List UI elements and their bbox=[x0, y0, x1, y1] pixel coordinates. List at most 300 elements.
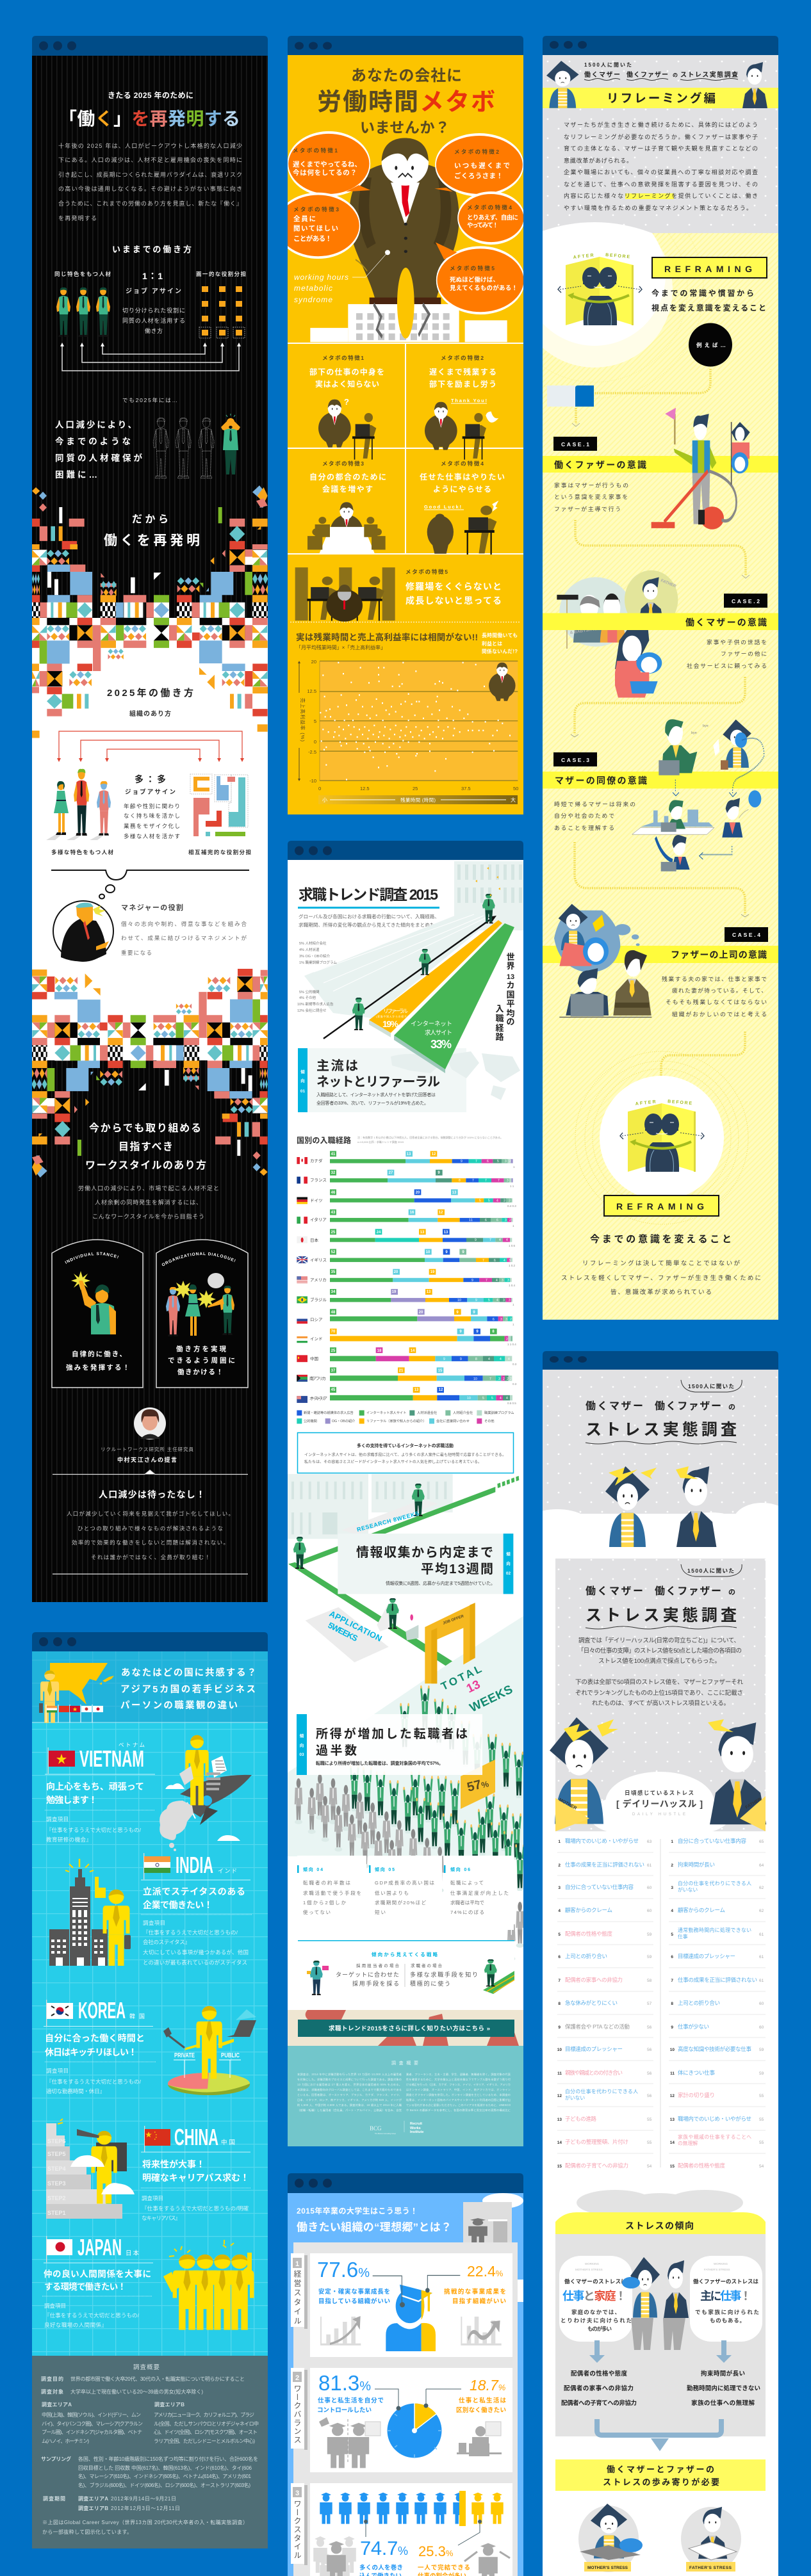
panel: stress survey bbox=[522, 1370, 791, 2576]
57 percent tag bbox=[461, 1760, 495, 1809]
inner bar numbers: 1095433 bbox=[457, 1299, 511, 1302]
job assign: 切り分けられた役割に bbox=[122, 307, 185, 314]
chart legend: 公的機関 bbox=[304, 1418, 317, 1423]
intro text: 企業や職場においても、個々の従業員への丁寧な相談対応や調査 bbox=[564, 168, 758, 175]
chart tags numbers: 70 bbox=[331, 1330, 336, 1334]
ranking table: father: 61 bbox=[759, 1932, 764, 1937]
arrows down bbox=[589, 2340, 732, 2363]
survey summary: 各国、性別・年齢10歳階級別に150名ずつ均等に割り付けを行い、合計600名を bbox=[78, 2456, 258, 2462]
icon: stairs man: STEP1 bbox=[47, 2210, 66, 2216]
chart tags numbers: 10 bbox=[426, 1251, 430, 1254]
outside bar numbers bbox=[507, 1165, 517, 1405]
ranking table: father: 自分の仕事を代わりにできる人 bbox=[678, 1880, 751, 1886]
vertical label: 平 bbox=[506, 999, 515, 1009]
chart tags numbers: 24 bbox=[377, 1231, 381, 1235]
card 2: work balance bbox=[291, 2368, 512, 2472]
feature 2 cell: 部下を励まし労う bbox=[429, 379, 496, 389]
outside bar numbers: 1 bbox=[512, 1323, 514, 1326]
survey title: 働くファザー bbox=[627, 70, 668, 79]
survey title: 1500人に聞いた bbox=[688, 1383, 734, 1389]
case 1: 働くファザーの意識 bbox=[554, 460, 646, 470]
father stress text: でも家族に向けられた bbox=[695, 2309, 759, 2315]
divider bottom bbox=[53, 1574, 248, 1575]
bubble texts: 全員に bbox=[293, 215, 316, 223]
icon: worried man bbox=[221, 414, 240, 474]
chart axis labels: 20 bbox=[311, 659, 316, 665]
divider top bbox=[53, 1470, 248, 1474]
internet support box bbox=[297, 1433, 514, 1473]
chart tags numbers: 35 bbox=[331, 1270, 336, 1274]
for example bubble bbox=[689, 323, 732, 366]
survey summary: 調査概要 bbox=[133, 2363, 160, 2371]
case 2: CASE.2 bbox=[732, 598, 760, 604]
ranking table: mother: 10 bbox=[557, 2048, 562, 2052]
browser header panel 2 bbox=[288, 36, 523, 55]
inner bar numbers: 6332 bbox=[493, 1318, 512, 1322]
card 1: management style bbox=[291, 2253, 512, 2357]
survey item: 『仕事をするうえで大切だと思うもの/明確 bbox=[142, 2205, 249, 2212]
section heading: styles: 今からでも取り組める bbox=[89, 1122, 201, 1134]
mother list: 配偶者の性格や態度 bbox=[571, 2370, 627, 2378]
section: vietnam bbox=[45, 1735, 252, 1851]
headline: 企業で働きたい！ bbox=[143, 1900, 213, 1910]
job offer label: JOB OFFER bbox=[443, 1614, 465, 1626]
survey overview: The Boston Consulting Group bbox=[375, 2133, 397, 2135]
country names: ドイツ bbox=[310, 1199, 323, 1203]
vertical label: 国 bbox=[506, 990, 515, 1000]
icon: big father bbox=[708, 1719, 766, 1831]
trend 05 card: 短い bbox=[375, 1909, 386, 1915]
card: organizational dialogue: 働きかける！ bbox=[177, 1368, 223, 1376]
referral label: 19% bbox=[382, 1019, 399, 1029]
section intro bbox=[78, 1185, 219, 1220]
panel: working hours metabolic syndrome bbox=[277, 55, 524, 814]
bubble texts: ごくろうさま！ bbox=[454, 172, 503, 180]
trend 01 box: 向 bbox=[300, 1078, 305, 1083]
x axis bar: 残業時間 (時間) bbox=[400, 797, 436, 803]
ranking table: father: 配偶者の性格や態度 bbox=[678, 2162, 725, 2169]
ranking table: mother: 急な休みがとりにくい bbox=[565, 2000, 618, 2006]
ranking table: father: 55 bbox=[759, 2141, 764, 2145]
survey summary: 2012年9月14日〜9月21日 bbox=[111, 2495, 176, 2502]
ranking table: mother: 54 bbox=[647, 2164, 652, 2169]
chart tags numbers: 14 bbox=[411, 1349, 415, 1353]
chart axis labels bbox=[307, 659, 518, 791]
compromise band: ストレスの歩み寄りが必要 bbox=[603, 2477, 719, 2487]
ranking table: father bbox=[669, 1838, 766, 2169]
callout: 関係ないんだ!? bbox=[482, 648, 518, 654]
speech bubbles bbox=[277, 133, 524, 313]
ranking table: father: 3 bbox=[671, 1886, 673, 1890]
statement: 人口減少により、 bbox=[55, 419, 136, 430]
header strip bbox=[32, 1651, 268, 1722]
survey item: 『仕事をするうえで大切だと思うもの/ bbox=[46, 2078, 142, 2085]
intro text: マザーたちが生き生きと働き続けるために、具体的にはどのよう bbox=[564, 121, 758, 128]
chart tags numbers: 20 bbox=[394, 1270, 398, 1274]
survey item: 会社のステイタス』 bbox=[143, 1939, 190, 1945]
intro text: 十年後の 2025 年は、人口がピークアウトし本格的な人口減少 bbox=[58, 142, 242, 149]
manager portrait bbox=[53, 901, 113, 961]
stress trend section: ストレスの傾向 bbox=[625, 2221, 694, 2231]
trend 06 card: 傾向 06 bbox=[450, 1867, 470, 1872]
icon: work life people bbox=[319, 2417, 502, 2468]
ranking table: mother: 目標達成のプレッシャー bbox=[565, 2046, 623, 2052]
ranking table: mother: 12 bbox=[557, 2094, 562, 2098]
chart tags numbers: 16 bbox=[410, 1211, 414, 1215]
icon: stairs man: STEP4 bbox=[47, 2166, 66, 2172]
crowd of people bbox=[295, 1685, 525, 1961]
ranking table: mother: 56 bbox=[647, 2094, 652, 2098]
chart: stacked bars bbox=[297, 1151, 513, 1423]
chart tags numbers: 46 bbox=[331, 1191, 336, 1195]
ranking table: mother: がいない bbox=[565, 2094, 585, 2101]
case 4: CASE.4 bbox=[732, 932, 760, 938]
english label: working hours bbox=[294, 273, 348, 282]
survey summary: ム(ハノイ、ホーチミン) bbox=[42, 2438, 89, 2444]
white circle bbox=[523, 222, 666, 346]
content area bbox=[293, 2242, 518, 2576]
outside bar numbers: 1 0.4 bbox=[509, 1284, 516, 1287]
icon: multitasking person bbox=[464, 2543, 510, 2576]
chart tags numbers: 9 bbox=[445, 1251, 448, 1254]
chart tags numbers: 52 bbox=[331, 1251, 336, 1254]
but in 2025: でも2025年には… bbox=[122, 397, 177, 403]
feature 3 cell bbox=[307, 460, 386, 554]
chart tags numbers bbox=[331, 1153, 495, 1392]
job assign: 働き方 bbox=[145, 327, 163, 334]
labels under figures: 多様な特色をもつ人材 bbox=[51, 849, 113, 855]
strategy box bbox=[298, 1940, 514, 1999]
grey intro background bbox=[543, 55, 778, 233]
y axis bbox=[298, 661, 306, 781]
panel: reinventing work 2025 bbox=[32, 56, 268, 1602]
closing text: ひとつの取り組みで様々なものが解決されるような bbox=[78, 1525, 223, 1532]
intro text: を再発明する bbox=[58, 215, 97, 222]
survey overview: Works bbox=[410, 2126, 421, 2130]
cloud edge bbox=[522, 1503, 791, 1553]
icon: big mother: MOTHER bbox=[558, 1798, 577, 1811]
callout: 長時間働いても bbox=[482, 632, 518, 638]
referral label: リファーラル bbox=[383, 1008, 408, 1014]
chart: scatter bbox=[320, 661, 518, 781]
survey summary: サンプリング bbox=[41, 2456, 71, 2462]
ranking table: mother: 配偶者の性格や態度 bbox=[565, 1931, 612, 1937]
building top right bbox=[454, 861, 523, 930]
job assign text: なく持ち味を活かし bbox=[124, 813, 180, 819]
icon: mother top bbox=[546, 61, 579, 108]
case 2: CLEANING TRADER bbox=[562, 615, 603, 629]
trend 06 card: 求職者は平均で bbox=[450, 1899, 484, 1906]
trend 05 card: 傾向 05 bbox=[375, 1867, 395, 1872]
survey summary: 調査期間 bbox=[43, 2495, 65, 2502]
manager role text: 重要になる bbox=[121, 950, 152, 956]
chart note: n=13,000 出所：求職トレンド調査 2015 bbox=[357, 1140, 404, 1144]
headline: 勉強します！ bbox=[46, 1795, 97, 1805]
inner bar numbers: 105544 bbox=[467, 1397, 508, 1400]
card 1: management style: 安定・確実な事業成長を bbox=[318, 2288, 390, 2296]
mother stress text: MOTHER'S STRESS bbox=[575, 2268, 603, 2271]
intro text: などを通じて、仕事への意欲発揮を阻害する要因を見つけ、その bbox=[564, 181, 758, 188]
survey summary: 調査エリアB bbox=[78, 2505, 108, 2511]
feature 4 cell: ようにやらせる bbox=[433, 485, 491, 494]
chart axis labels: -10 bbox=[309, 778, 316, 784]
card: organizational dialogue: ORGANIZATIONAL DIALOGUE! bbox=[161, 1252, 236, 1266]
intro text: 引き起こし、成長期につくられた雇用パラダイムは、衰退リスク bbox=[58, 171, 242, 178]
title: あなたの会社に bbox=[351, 67, 462, 85]
ranking table: father: 62 bbox=[759, 1886, 764, 1890]
connecting arrows bbox=[60, 343, 241, 371]
icon: big father: FATHER bbox=[744, 1797, 762, 1810]
trend 01 box: 入職経路として、インターネット求人サイトを挙げた回答者は bbox=[316, 1092, 436, 1098]
card: organizational dialogue: できるよう周囲に bbox=[168, 1357, 235, 1365]
chart tags numbers: 32 bbox=[331, 1171, 336, 1175]
route tracks bbox=[304, 912, 514, 1073]
white bubble right bbox=[690, 2256, 762, 2342]
outside bar numbers: 1 bbox=[512, 1303, 514, 1306]
headline: 向上心をもち、頑張って bbox=[46, 1781, 144, 1792]
panel title bbox=[120, 1667, 256, 1711]
case 4: 組織がおかしいのではと考える bbox=[672, 1010, 767, 1017]
job assign: ジョブ アサイン bbox=[126, 287, 181, 295]
case 3: CASE.3 bbox=[561, 757, 589, 763]
people on timeline bbox=[293, 1484, 425, 1629]
labels under figures: 相互補完的な役割分担 bbox=[188, 849, 251, 855]
mother list: 配偶者への子育てへの非協力 bbox=[561, 2399, 637, 2407]
panel background bbox=[288, 55, 523, 814]
father stress illustration: FATHER'S STRESS bbox=[689, 2566, 732, 2570]
father stress text: 主に仕事！ bbox=[700, 2290, 751, 2303]
inner survey panel bbox=[555, 1559, 766, 1831]
survey summary: 名)、ブラジル(600名)、ドイツ(606名)、ロシア(600名)、オーストラリア(603名) bbox=[78, 2482, 250, 2488]
x axis bar: 小 bbox=[322, 797, 327, 803]
ranking table: father: 4 bbox=[671, 1909, 673, 1913]
section: japan bbox=[42, 2234, 254, 2330]
case 3 bbox=[543, 719, 778, 871]
ranking table: father: 13 bbox=[670, 2118, 675, 2122]
ranking table: father: 顧客からのクレーム bbox=[678, 1907, 725, 1913]
country names: イタリア bbox=[310, 1217, 327, 1222]
mother stress text: WORKING bbox=[585, 2262, 599, 2265]
ranking table: mother bbox=[557, 1838, 653, 2169]
outside bar numbers: 1 0.6 bbox=[509, 1244, 516, 1247]
survey overview: 性を確保するために、大学卒業以上と高校卒業以下でサンプル数を半数ずつ割り付 bbox=[406, 2077, 511, 2082]
icon: balance man: PRIVATE bbox=[174, 2052, 195, 2059]
chart legend bbox=[304, 1410, 514, 1423]
ranking table: mother: 55 bbox=[647, 2118, 652, 2122]
headline bbox=[143, 1886, 245, 1910]
chart legend: 職業訓練プログラム bbox=[484, 1410, 514, 1415]
survey overview: はオンライン調査、オーストラリア、中国、インド、南アフリカでは、オンライン bbox=[406, 2087, 511, 2092]
country kana: 韓国 bbox=[129, 2013, 145, 2020]
trend 02 title: 平均13週間 bbox=[421, 1562, 493, 1576]
card 2: work balance: 仕事と私生活を自分で bbox=[318, 2397, 384, 2404]
outside bar numbers: 0.3 bbox=[512, 1382, 517, 1386]
headline: 休日はキッチリほしい！ bbox=[45, 2047, 137, 2057]
panel background bbox=[32, 56, 268, 1602]
icon: stairs man: STEP5 bbox=[47, 2151, 66, 2157]
headline: 将来性が大事！ bbox=[142, 2159, 205, 2169]
trend 01 box: 主流は bbox=[316, 1058, 358, 1073]
ranking table: father: 家族や親戚の仕事をすることへ bbox=[678, 2134, 751, 2140]
survey overview: BCG bbox=[370, 2125, 382, 2132]
closing heading: 今までの意識を変えること bbox=[590, 1233, 732, 1245]
feature 4 cell: 任せた仕事はやりたい bbox=[420, 472, 505, 482]
flag: india bbox=[143, 1853, 170, 1879]
country kana: 中国 bbox=[221, 2139, 235, 2146]
ranking table: mother: 自分に合っていない仕事内容 bbox=[565, 1884, 634, 1890]
trend 05 card: 低い国よりも bbox=[375, 1890, 409, 1896]
chart tags numbers: 15 bbox=[438, 1369, 443, 1373]
role squares bbox=[199, 286, 245, 338]
portrait bbox=[134, 1407, 166, 1439]
section heading: リフレーミング編 bbox=[607, 92, 716, 105]
icon: father top bbox=[742, 62, 767, 108]
reframing box: REFRAMING bbox=[664, 264, 752, 274]
chart tags numbers: 9 bbox=[476, 1330, 479, 1334]
card 2: work balance: 区別なく働きたい bbox=[456, 2406, 506, 2414]
survey item: 『仕事をするうえで大切だと思うもの/ bbox=[143, 1929, 238, 1936]
ranking table: mother: 55 bbox=[647, 2141, 652, 2145]
trend 02 title: 情報収集から内定まで bbox=[356, 1545, 493, 1560]
ranking table: mother: 配偶者の子育てへの非協力 bbox=[565, 2162, 628, 2169]
section: india bbox=[49, 1852, 252, 1966]
card: individual stance: INDIVIDUAL STANCE! bbox=[65, 1252, 119, 1264]
strategy box: 多様な求職手段を知り bbox=[410, 1971, 478, 1978]
intro text: 意識改革があげられる。 bbox=[564, 157, 632, 164]
chart tags numbers: 13 bbox=[414, 1388, 419, 1392]
card 3: work style: ワークスタイル bbox=[293, 2500, 302, 2559]
ranking table: mother: 仕事の成果を正当に評価されない bbox=[565, 1861, 644, 1868]
icon: four men bbox=[163, 2240, 254, 2330]
manager role text: 個々の志向や制約、得意な事などを組み合 bbox=[121, 921, 247, 927]
case 1: CASE.1 bbox=[561, 441, 589, 448]
job assign text: 年齢や性別に関わり bbox=[124, 803, 180, 809]
feature 1 cell: 部下の仕事の中身を bbox=[309, 367, 384, 377]
small route labels: 4% その他 bbox=[299, 995, 316, 1000]
icon: buildings and man bbox=[49, 1859, 131, 1966]
survey item: 良好な職場の人間関係』 bbox=[44, 2322, 107, 2328]
total 13 weeks label: TOTAL bbox=[439, 1663, 484, 1693]
internet label: 33% bbox=[430, 1038, 452, 1051]
feature 1 cell: メタボの特徴1 bbox=[322, 355, 364, 361]
white bubble left bbox=[559, 2256, 632, 2342]
chart tags numbers: 25 bbox=[331, 1231, 336, 1235]
survey summary: バイ)、タイ(バンコク圏)、マレーシア(クアラルン bbox=[42, 2421, 143, 2427]
survey item bbox=[142, 2195, 249, 2221]
ranking table: father: 60 bbox=[759, 2002, 764, 2006]
feature 4 cell: メタボの特徴4 bbox=[441, 460, 484, 467]
trend 02 title: 02 bbox=[506, 1571, 511, 1576]
survey overview: Recruit bbox=[410, 2122, 422, 2126]
ranking table: mother: 自分の仕事を代わりにできる人 bbox=[565, 2088, 638, 2094]
headline bbox=[142, 2159, 249, 2183]
case 2: 家事や子供の世話を bbox=[707, 638, 767, 645]
ranking table: mother: 子どもの整理整頓、片付け bbox=[565, 2139, 628, 2145]
panel: asia five countries bbox=[32, 1651, 268, 2548]
inner intro text: 下の表は全部で50項目のストレス値を、マザーとファザーそれ bbox=[575, 1678, 743, 1686]
survey summary: 中国(上海)、韓国(ソウル)、インド(デリー、ムン bbox=[42, 2411, 141, 2418]
daily hassle heading: 日頃感じているストレス bbox=[625, 1790, 694, 1796]
researcher name: リクルートワークス研究所 主任研究員 bbox=[101, 1446, 193, 1452]
compromise band: 働くマザーとファザーの bbox=[607, 2465, 714, 2474]
icon: stairs man bbox=[46, 2119, 135, 2219]
trend 06 card: 仕事満足度が向上した bbox=[450, 1890, 509, 1896]
ranking table: father: 7 bbox=[671, 1979, 673, 1983]
manager role text: わせて、成果に結びつけるマネジメントが bbox=[121, 935, 247, 941]
trend 04 card: 転職者の約半数は bbox=[303, 1879, 351, 1886]
label: same people: 同じ特色をもつ人材 bbox=[54, 271, 111, 277]
intro text: 内容に応じた様々なリフレーミングを提供していくことは、働き bbox=[564, 192, 758, 199]
main title: 求職トレンド調査 2015 bbox=[299, 886, 438, 903]
x axis bar bbox=[318, 795, 518, 804]
inner intro text: 「日々の仕事の支障」のストレス値を50点とした場合の各項目の bbox=[578, 1647, 742, 1655]
icon: mother and father center bbox=[622, 2257, 689, 2350]
headline: 自分に合った働く時間と bbox=[45, 2033, 145, 2043]
section subheading: 組織のあり方 bbox=[129, 709, 171, 718]
father list bbox=[687, 2370, 760, 2407]
vertical label: 界 bbox=[506, 961, 515, 971]
trend 04 card bbox=[297, 1856, 366, 1930]
card 1: management style: 目指す組織がいい bbox=[452, 2297, 506, 2305]
survey summary: 調査エリアB bbox=[154, 2401, 184, 2408]
walking people bbox=[352, 894, 495, 1030]
chart tags numbers: 25 bbox=[331, 1349, 336, 1353]
ranking table: father: 12 bbox=[670, 2094, 675, 2098]
chart tags numbers: 21 bbox=[399, 1369, 404, 1373]
ranking table: mother: 顧客からのクレーム bbox=[565, 1907, 612, 1913]
banner link bbox=[288, 2010, 523, 2046]
chart tags numbers: 19 bbox=[392, 1290, 397, 1294]
ranking table: mother: 9 bbox=[558, 2025, 561, 2030]
daily hassle heading: [ デイリーハッスル ] bbox=[616, 1799, 703, 1809]
section intro: 人材余剰の同時発生を解消するには、 bbox=[95, 1199, 202, 1206]
chart tags numbers: 13 bbox=[407, 1153, 411, 1156]
ranking table: father: 家計の切り盛り bbox=[678, 2092, 715, 2098]
ranking table: father: 仕事が少ない bbox=[678, 2023, 709, 2030]
intro text: やすい環境を作るための重要なマネジメント策となるだろう。 bbox=[564, 204, 752, 211]
trend 03 box: 03 bbox=[299, 1753, 304, 1757]
card 2: work balance: 仕事と私生活は bbox=[459, 2397, 506, 2404]
trend 03 box: 向 bbox=[300, 1742, 304, 1748]
mother stress illustration: MOTHER'S STRESS bbox=[587, 2566, 628, 2570]
icon: clock pie bbox=[375, 2389, 461, 2458]
chart tags numbers: 12 bbox=[439, 1211, 443, 1215]
survey summary: ラリア(全国、ただしシドニーとメルボルン中心) bbox=[154, 2438, 255, 2444]
closing text: 皆、意識改革が求められている bbox=[610, 1288, 712, 1296]
inner bar numbers: 97433 bbox=[471, 1279, 509, 1283]
ranking table: mother: 保護者会や PTA などの活動 bbox=[565, 2023, 630, 2030]
strategy box: 傾向から見えてくる戦略 bbox=[372, 1951, 438, 1957]
small route labels: 5% 公的機関 bbox=[299, 989, 320, 994]
inner intro text: 調査では「デイリーハッスル(日常の苛立ちごと)」について、 bbox=[578, 1637, 740, 1644]
statement bbox=[55, 419, 142, 480]
case 2 bbox=[543, 571, 778, 698]
closing heading: 人口減少は待ったなし！ bbox=[99, 1489, 205, 1500]
trend 01 box: 全回答者の33%、次いで、リファーラルが19%を占めた。 bbox=[316, 1100, 429, 1106]
card 2: work balance: コントロールしたい bbox=[317, 2407, 372, 2414]
headline: 仲の良い人間関係を大事に bbox=[44, 2269, 151, 2279]
chart tags numbers: 20 bbox=[419, 1311, 423, 1315]
survey summary: 調査目的 bbox=[41, 2376, 63, 2382]
card 1: management style: 目指している組織がいい bbox=[318, 2297, 390, 2305]
country kana: 日本 bbox=[126, 2249, 139, 2257]
survey item: 教育研修の機会』 bbox=[46, 1836, 92, 1843]
survey item: 『仕事をするうえで大切だと思うもの/ bbox=[44, 2312, 140, 2319]
then reinvent heading: だから bbox=[132, 514, 168, 525]
panel: reframing bbox=[486, 55, 778, 1320]
bubble texts: 見えてくるものがある！ bbox=[450, 284, 518, 292]
title: いませんか？ bbox=[360, 119, 450, 136]
